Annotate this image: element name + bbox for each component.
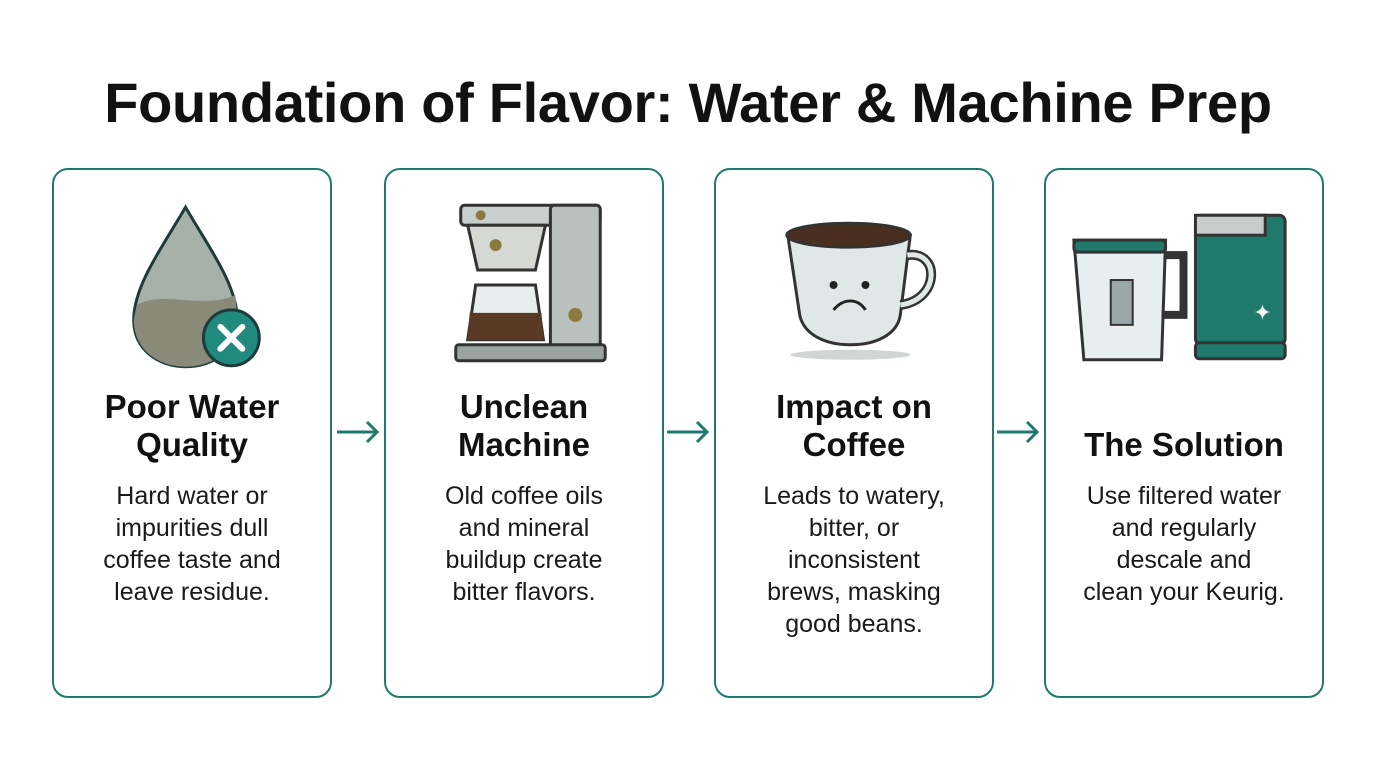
heading: Impact on	[776, 388, 932, 425]
heading	[776, 388, 932, 463]
body text: Leads to watery,	[763, 482, 945, 510]
icon: dirty coffee maker	[454, 204, 607, 362]
icon: sad coffee cup	[785, 222, 936, 360]
heading: Unclean	[460, 388, 588, 425]
body text: brews, masking	[767, 578, 941, 606]
body text: Old coffee oils	[445, 482, 603, 510]
body text	[445, 482, 603, 606]
body text: Hard water or	[116, 482, 268, 510]
body text: descale and	[1117, 546, 1251, 574]
body text: bitter flavors.	[452, 578, 596, 606]
title: Foundation of Flavor: Water & Machine Prep	[104, 71, 1272, 134]
icon: filter pitcher and clean machine	[1072, 214, 1287, 362]
arrow	[997, 421, 1039, 443]
body text: coffee taste and	[103, 546, 281, 574]
panel: the solution	[1044, 168, 1324, 698]
heading	[105, 388, 279, 463]
body text: buildup create	[445, 546, 603, 574]
heading: Poor Water	[105, 388, 279, 425]
body text	[103, 482, 281, 606]
body text: clean your Keurig.	[1083, 578, 1285, 606]
panel: impact on coffee	[714, 168, 994, 698]
heading: Machine	[458, 426, 590, 463]
body text	[763, 482, 945, 638]
body text: good beans.	[785, 610, 923, 638]
arrow	[337, 421, 379, 443]
panel: unclean machine	[384, 168, 664, 698]
heading	[458, 388, 590, 463]
heading: Coffee	[803, 426, 905, 463]
body text	[1083, 482, 1285, 606]
heading: The Solution	[1084, 426, 1284, 463]
body text: bitter, or	[809, 514, 899, 542]
heading: Quality	[136, 426, 248, 463]
body text: and mineral	[459, 514, 589, 542]
body text: impurities dull	[116, 514, 268, 542]
body text: leave residue.	[114, 578, 270, 606]
body text: inconsistent	[788, 546, 920, 574]
panel: poor water quality	[52, 168, 332, 698]
icon: dirty water drop	[132, 204, 261, 368]
body text: Use filtered water	[1087, 482, 1281, 510]
body text: and regularly	[1112, 514, 1256, 542]
icon: filter pitcher and clean machine: ✦	[1253, 300, 1272, 325]
arrow	[667, 421, 709, 443]
